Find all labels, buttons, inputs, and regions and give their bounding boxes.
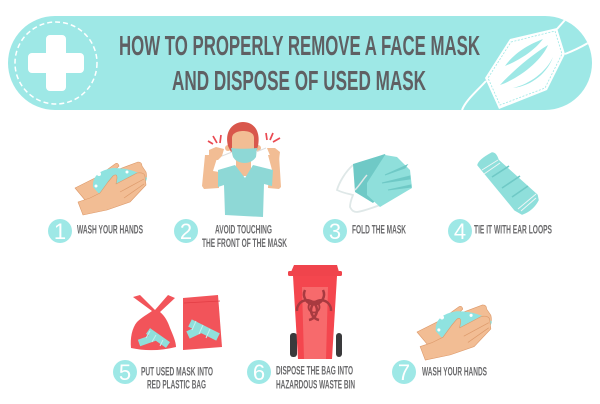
label: FOLD THE MASK <box>352 224 406 236</box>
icon: flat red bag with masks <box>183 295 222 350</box>
label: HAZARDOUS WASTE BIN <box>276 380 355 392</box>
step 7 <box>392 305 492 385</box>
icon: red biohazard waste bin <box>288 265 342 359</box>
number 5: 5 <box>119 360 131 385</box>
label: PUT USED MASK INTO <box>141 366 213 378</box>
number 7: 7 <box>398 360 410 385</box>
header banner <box>8 16 592 110</box>
label: DISPOSE THE BAG INTO <box>276 366 353 378</box>
step 2 <box>174 122 287 250</box>
label: WASH YOUR HANDS <box>77 224 143 236</box>
step 6 <box>247 265 355 392</box>
number 3: 3 <box>329 219 341 244</box>
icon: medical cross in dashed circle <box>15 22 97 104</box>
label <box>276 366 355 392</box>
label: WASH YOUR HANDS <box>422 366 487 378</box>
label: THE FRONT OF THE MASK <box>202 238 287 250</box>
label: AVOID TOUCHING <box>215 224 272 236</box>
title: AND DISPOSE OF USED MASK <box>172 65 426 96</box>
icon: washing hands <box>75 162 147 215</box>
title <box>119 30 480 96</box>
icon: person removing mask <box>202 122 281 217</box>
step 3 <box>323 154 412 244</box>
step 4 <box>448 153 552 244</box>
icon: tied red bag with masks <box>131 295 176 350</box>
number 6: 6 <box>253 360 265 385</box>
label: RED PLASTIC BAG <box>147 380 206 392</box>
icon: rolled mask with ear loops <box>478 153 538 214</box>
number 4: 4 <box>454 219 466 244</box>
number 2: 2 <box>180 219 192 244</box>
icon: white face mask <box>462 20 588 110</box>
icon: washing hands <box>417 305 492 360</box>
label <box>202 224 287 250</box>
step 1 <box>48 162 147 244</box>
number 1: 1 <box>54 219 66 244</box>
icon: folded mask <box>337 154 412 212</box>
icon: biohazard symbol <box>297 290 331 320</box>
label <box>141 366 213 392</box>
step 5 <box>113 295 222 392</box>
